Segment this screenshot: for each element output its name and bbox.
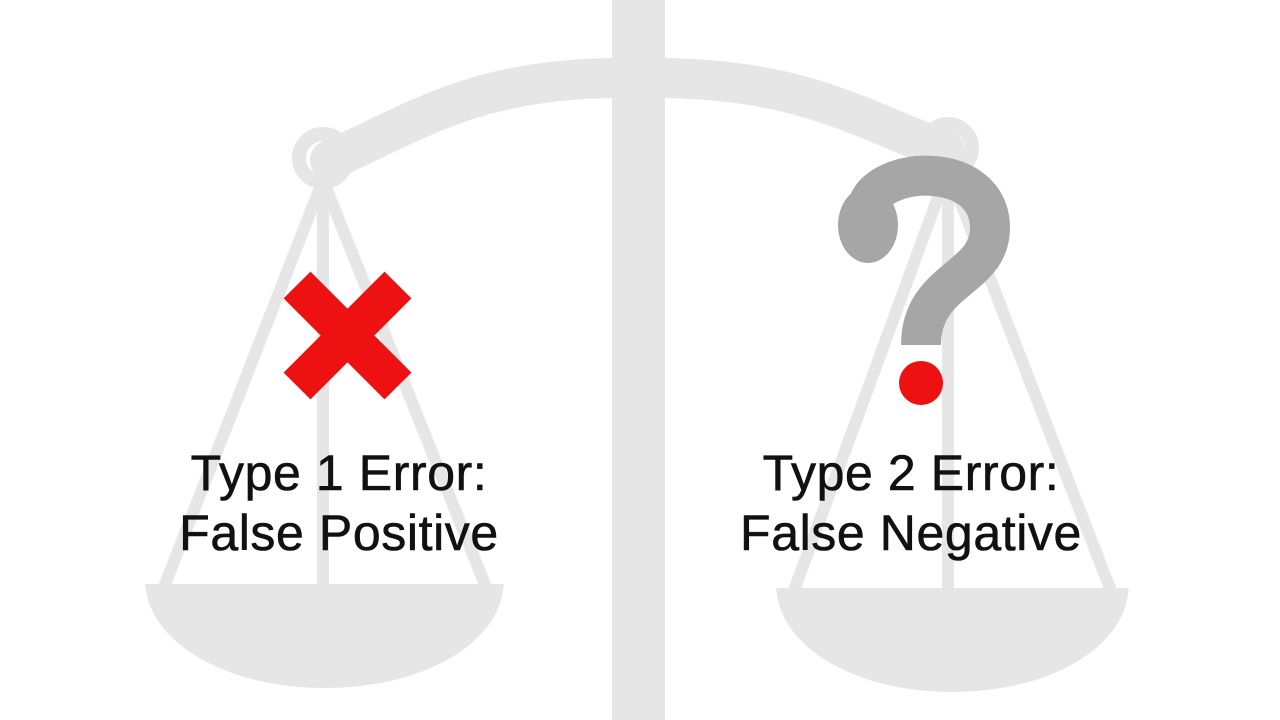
left ring (299, 134, 347, 182)
label: type 2 error: Type 2 Error: (763, 445, 1059, 501)
left pan (152, 180, 497, 682)
icon: red X (297, 285, 398, 386)
right pan (783, 170, 1122, 686)
label: type 2 error (740, 445, 1082, 561)
scale pole (612, 0, 665, 720)
right ring (924, 124, 972, 172)
scale beam (330, 78, 945, 160)
label: type 2 error: False Negative (740, 505, 1082, 561)
label: type 1 error: Type 1 Error: (191, 445, 487, 501)
icon: question mark (838, 176, 990, 405)
label: type 1 error: False Positive (179, 505, 499, 561)
label: type 1 error (179, 445, 499, 561)
